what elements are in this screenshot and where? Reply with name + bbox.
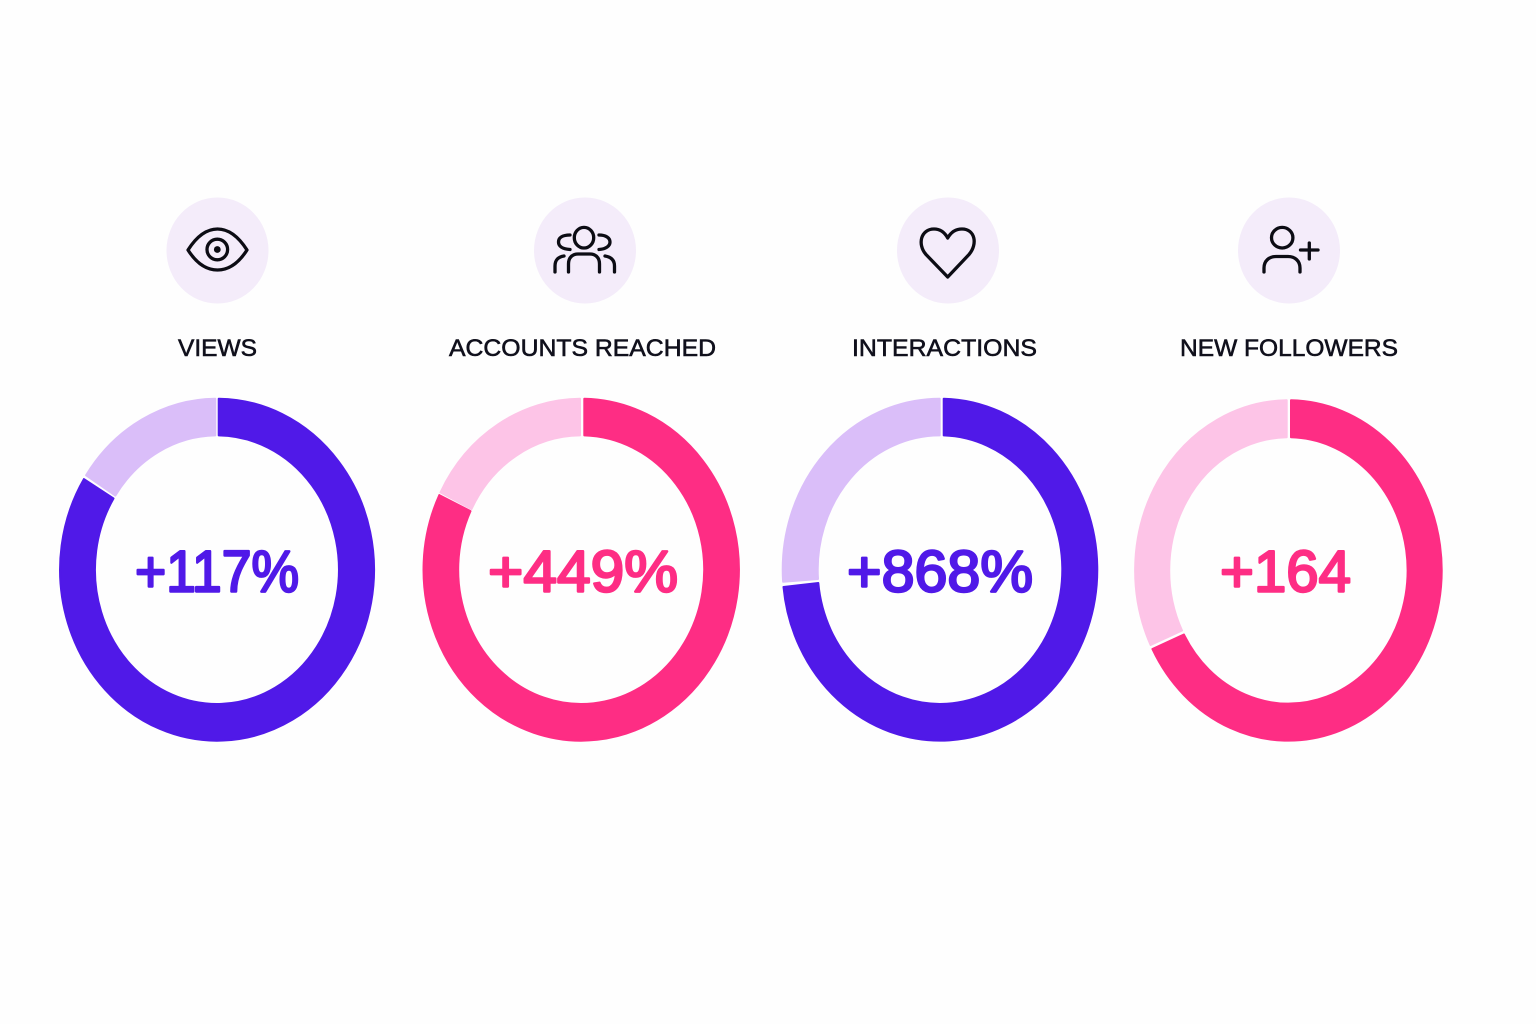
icon: heart <box>897 198 999 304</box>
donut chart: new followers <box>1135 400 1442 741</box>
icon: eye <box>166 198 268 304</box>
panel: interactions <box>783 198 1097 741</box>
icon: group of people <box>534 198 636 304</box>
label: interactions: INTERACTIONS <box>852 335 1037 362</box>
label: accounts reached: ACCOUNTS REACHED <box>449 335 716 362</box>
donut chart: interactions <box>783 399 1097 741</box>
panel: accounts reached <box>424 198 739 741</box>
value: +164: +164 <box>1220 540 1351 604</box>
panel: new followers <box>1135 198 1442 741</box>
value: +868%: +868% <box>847 540 1033 604</box>
value: +117%: +117% <box>135 540 299 604</box>
panel: views <box>60 198 374 741</box>
label: views: VIEWS <box>178 335 257 362</box>
label: new followers: NEW FOLLOWERS <box>1180 335 1398 362</box>
donut chart: views <box>60 399 374 741</box>
value: +449%: +449% <box>488 540 678 604</box>
icon: add user <box>1238 198 1340 304</box>
donut chart: accounts reached <box>424 399 739 741</box>
